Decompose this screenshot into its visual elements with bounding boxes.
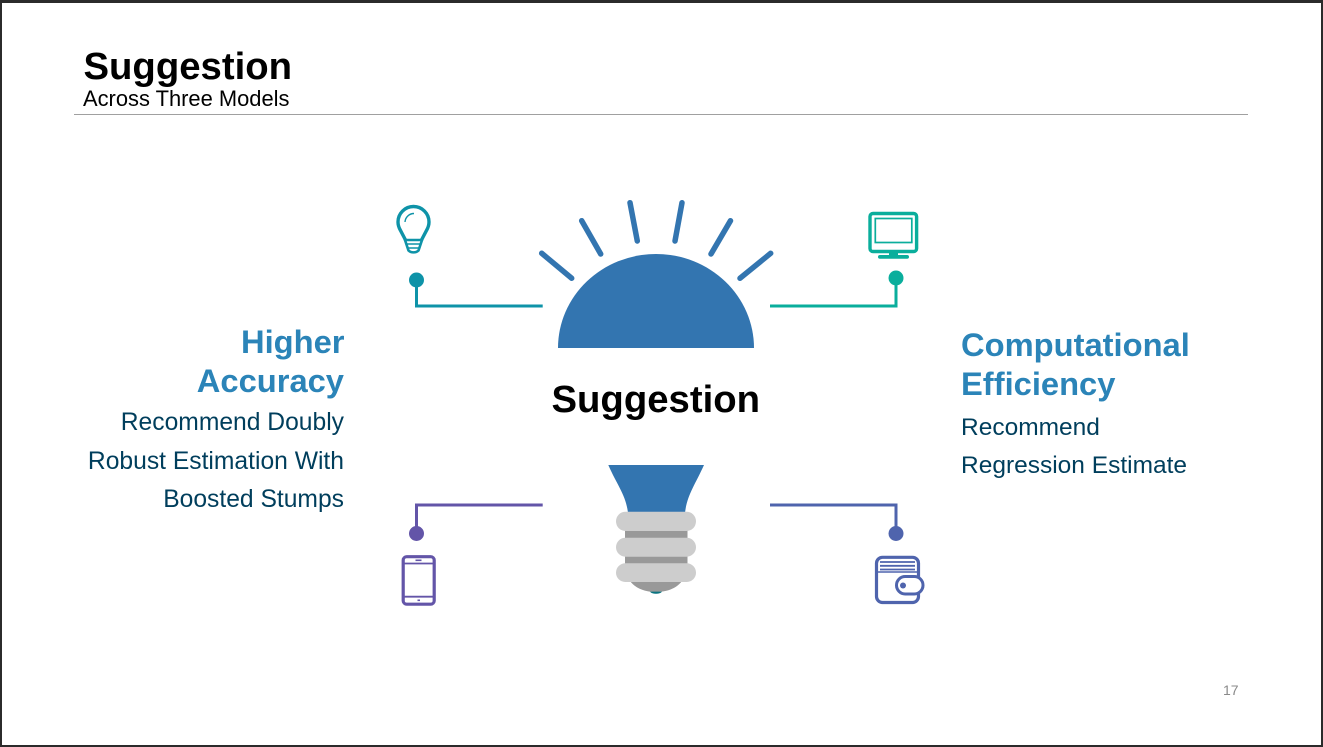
center label: Suggestion xyxy=(552,378,760,421)
text block: computational efficiency: Recommend xyxy=(961,414,1100,441)
text block: higher accuracy: Higher xyxy=(241,323,345,360)
text block: higher accuracy: Accuracy xyxy=(197,362,344,399)
icon: light bulb base xyxy=(608,465,704,594)
page number: 17 xyxy=(1223,682,1239,698)
text block: higher accuracy xyxy=(88,323,345,513)
text block: computational efficiency: Efficiency xyxy=(961,365,1115,402)
icon: monitor xyxy=(870,214,917,259)
text block: higher accuracy: Robust Estimation With xyxy=(88,448,344,475)
icon: light bulb outline xyxy=(398,206,429,252)
text block: computational efficiency xyxy=(961,326,1190,479)
icon: tablet xyxy=(403,557,434,604)
text block: higher accuracy: Boosted Stumps xyxy=(163,486,344,513)
connector: bottom left xyxy=(409,505,543,541)
connector: top left xyxy=(409,272,543,306)
connector: top right xyxy=(770,270,904,306)
icon: wallet xyxy=(876,557,923,602)
subtitle: Across Three Models xyxy=(83,86,289,111)
icon: sun half circle with rays xyxy=(542,203,771,348)
title: Suggestion xyxy=(84,45,292,88)
text block: computational efficiency: Regression Estimate xyxy=(961,452,1187,479)
connector: bottom right xyxy=(770,505,904,541)
text block: computational efficiency: Computational xyxy=(961,326,1190,363)
text block: higher accuracy: Recommend Doubly xyxy=(121,409,345,436)
